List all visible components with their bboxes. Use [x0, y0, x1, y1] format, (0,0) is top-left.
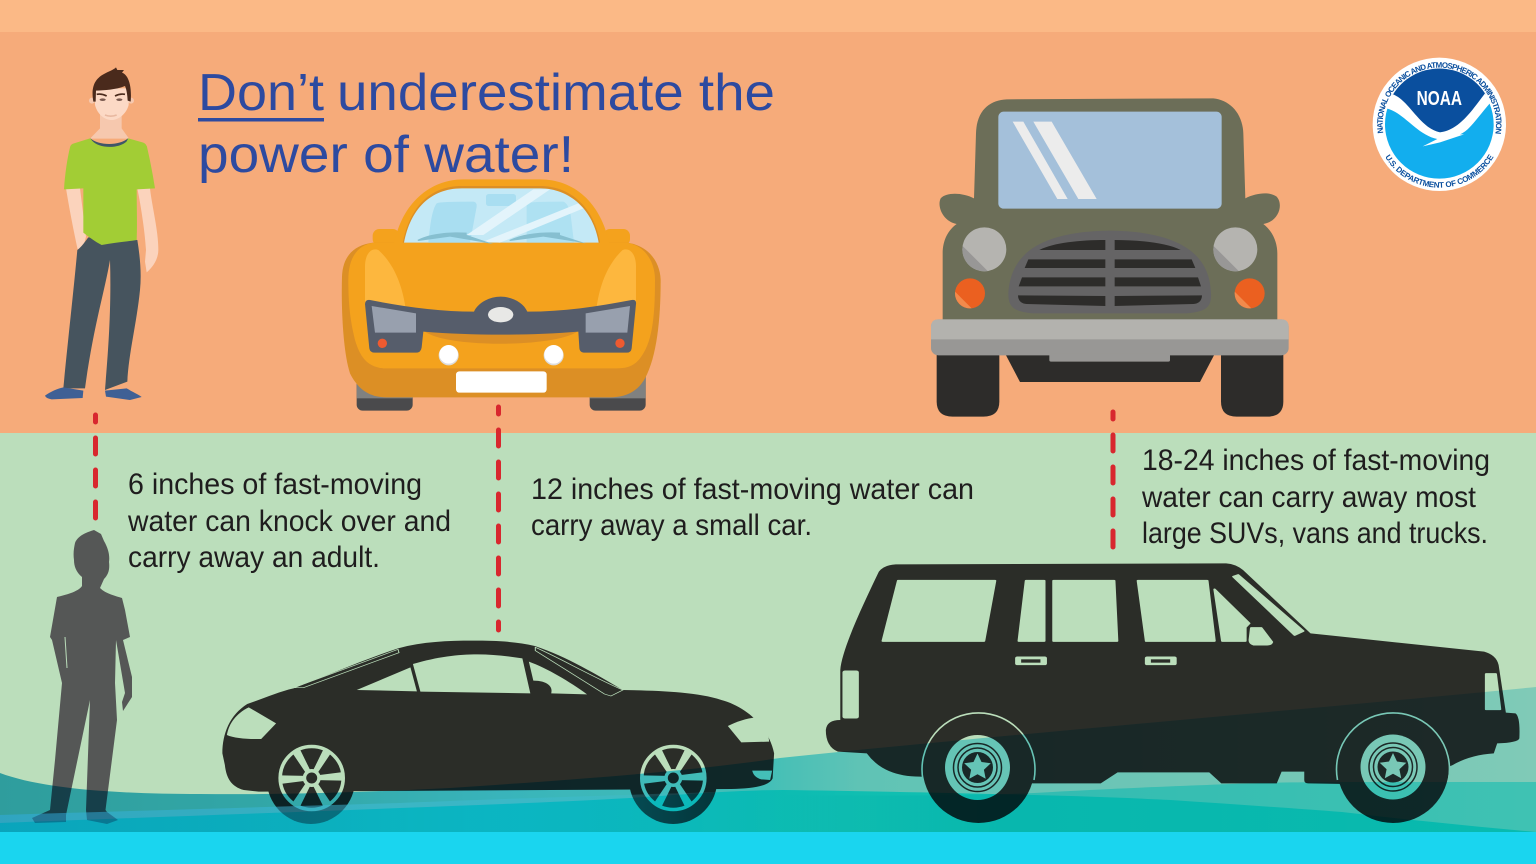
dashed connector: small car — [496, 407, 501, 630]
wheel: SUV front — [1336, 711, 1450, 823]
text: large vehicles: water can carry away most — [1141, 481, 1476, 514]
wheel: sedan front — [642, 746, 705, 810]
icon: NOAA logo: U.S. DEPARTMENT OF COMMERCE — [1386, 154, 1494, 188]
icon: SUV silhouette — [826, 563, 1520, 823]
title: Don’t — [198, 64, 325, 122]
icon: orange car front view — [342, 179, 661, 411]
wheel: sedan rear — [280, 746, 343, 810]
text: adult: 6 inches of fast-moving — [128, 468, 422, 501]
background: top band — [0, 0, 1536, 32]
water: right mid wave — [780, 782, 1536, 832]
text: small car — [531, 473, 974, 542]
background: green panel — [0, 433, 1536, 833]
water: front wave — [0, 790, 1536, 832]
icon: NOAA logo: NOAA — [1417, 87, 1462, 110]
water: back wave — [0, 687, 1536, 832]
background: orange panel — [0, 32, 1536, 433]
icon: adult silhouette — [32, 530, 132, 824]
text: small car: 12 inches of fast-moving water can — [531, 473, 974, 506]
title: power of water! — [198, 126, 574, 184]
water: left lighter band — [0, 790, 780, 832]
title — [198, 64, 775, 184]
title: underestimate the — [337, 64, 775, 122]
icon: sedan silhouette — [222, 641, 774, 824]
text: small car: carry away a small car. — [531, 509, 812, 542]
dashed connector: large vehicle — [1110, 412, 1116, 547]
wheel: SUV rear — [922, 711, 1035, 823]
icon: green truck front view — [931, 98, 1289, 417]
dashed connector: adult — [93, 415, 98, 520]
text: adult: carry away an adult. — [128, 541, 380, 574]
icon: NOAA logo — [1372, 58, 1506, 191]
text: large vehicles: large SUVs, vans and trucks. — [1142, 517, 1488, 550]
text: adult: water can knock over and — [127, 505, 451, 538]
icon: NOAA logo: NATIONAL OCEANIC AND ATMOSPHERIC ADMINISTRATION — [1377, 62, 1502, 134]
text: adult — [127, 468, 451, 574]
icon: colored adult figure — [45, 67, 158, 400]
text: large vehicles — [1141, 444, 1490, 550]
water: bottom band — [0, 832, 1536, 864]
text: large vehicles: 18-24 inches of fast-moving — [1142, 444, 1490, 477]
